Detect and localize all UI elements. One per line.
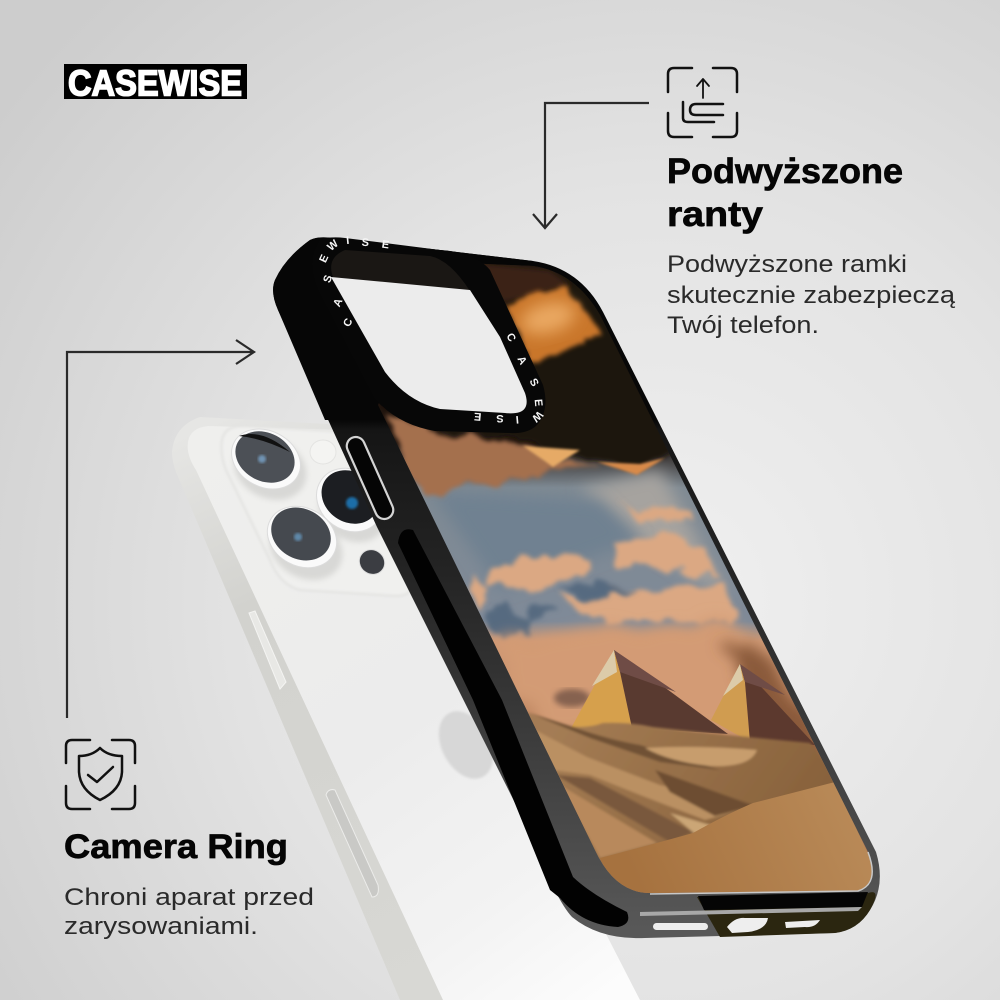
side button 2 [326,790,378,897]
light upper-right sky [580,470,730,600]
ring inner wall [331,250,470,291]
logo: CASEWISE: CASEWISE [68,62,242,104]
ring lettering: S [496,412,504,424]
lens glints [239,434,358,541]
ring lettering: C [503,331,518,344]
front dune [600,782,880,900]
text: raised edges description [667,251,956,339]
lens ring 2 [257,494,347,580]
lit cloud band [385,418,600,492]
case bottom edge: black strip [698,892,868,910]
ring lettering: E [532,399,544,407]
heading: Podwyższone ranty [667,152,903,234]
ring lettering: A [514,354,529,367]
dark blue clouds [480,584,640,636]
ring opening showing background [331,277,527,413]
lens ring 1 [221,417,311,501]
ring lettering: S [361,237,369,249]
power button capsule [344,434,396,522]
glowing orange patch [500,286,604,362]
dark storm cloud [506,265,670,466]
heading: Podwyższone ranty: ranty [667,195,764,234]
dune dark band [655,770,755,816]
side button 1 [249,611,286,689]
ring lettering [317,235,545,425]
ring lettering: A [331,297,345,309]
ring lettering: E [317,253,331,265]
microphone [354,545,390,579]
port openings [653,918,820,933]
text: raised edges description: skutecznie zabezpieczą [667,282,956,309]
case bottom edge: light line [640,907,862,916]
screen lower-right rim highlight [650,852,872,894]
lens shadows [222,424,400,592]
icon: shield [66,740,135,809]
heading: Camera Ring: Camera Ring [64,828,288,866]
lower sky glow [490,625,790,730]
dune light crescent [645,747,757,766]
brown top cloud [484,264,568,304]
text: raised edges description: Twój telefon. [667,312,819,339]
black phone case [273,237,880,938]
icon: raised edges [668,68,737,137]
ring lettering: W [529,408,545,424]
ring lettering: E [381,239,390,251]
dune crest [527,712,720,770]
text: camera ring description: zarysowaniami. [64,913,258,940]
lens 1 [226,421,304,493]
text: camera ring description [64,884,314,940]
dunes [528,712,834,866]
camera ring [312,235,545,433]
camera plateau [222,426,412,596]
big pyramid [570,650,728,734]
ring lettering: S [321,273,335,284]
lower sky shade [720,640,830,760]
dune lower light [560,785,657,858]
case side slot [398,529,628,927]
flash [310,440,336,464]
cloud highlight right [597,458,665,475]
lens 3 [311,459,389,535]
dune bright [670,812,710,833]
ring lettering: W [325,237,341,254]
ring lettering: E [474,410,482,422]
dune dark stripe [556,775,693,842]
ring lettering: S [527,377,541,389]
text: raised edges description: Podwyższone ramki [667,251,907,278]
case bottom edge: dark right part [697,892,876,937]
printed artwork: desert and sky [370,250,890,905]
pink clouds [470,507,735,625]
arrow: to raised edges [533,103,649,228]
lens ring 3 [304,455,396,545]
ring lettering: I [346,235,350,247]
heading: Podwyższone ranty: Podwyższone [667,152,903,191]
dark blot [554,689,590,707]
ring lettering: I [515,413,519,425]
dune light slope [535,730,755,820]
apple logo [438,711,493,779]
blue haze [440,492,640,570]
arrow: to camera ring [67,340,254,718]
ring lettering: C [341,317,355,329]
white phone behind the case [172,417,650,1000]
cloud highlights [523,446,580,467]
case upper black shell [273,237,533,420]
text: camera ring description: Chroni aparat przed [64,884,314,911]
lens 2 [262,497,340,571]
small pyramid [711,664,815,745]
